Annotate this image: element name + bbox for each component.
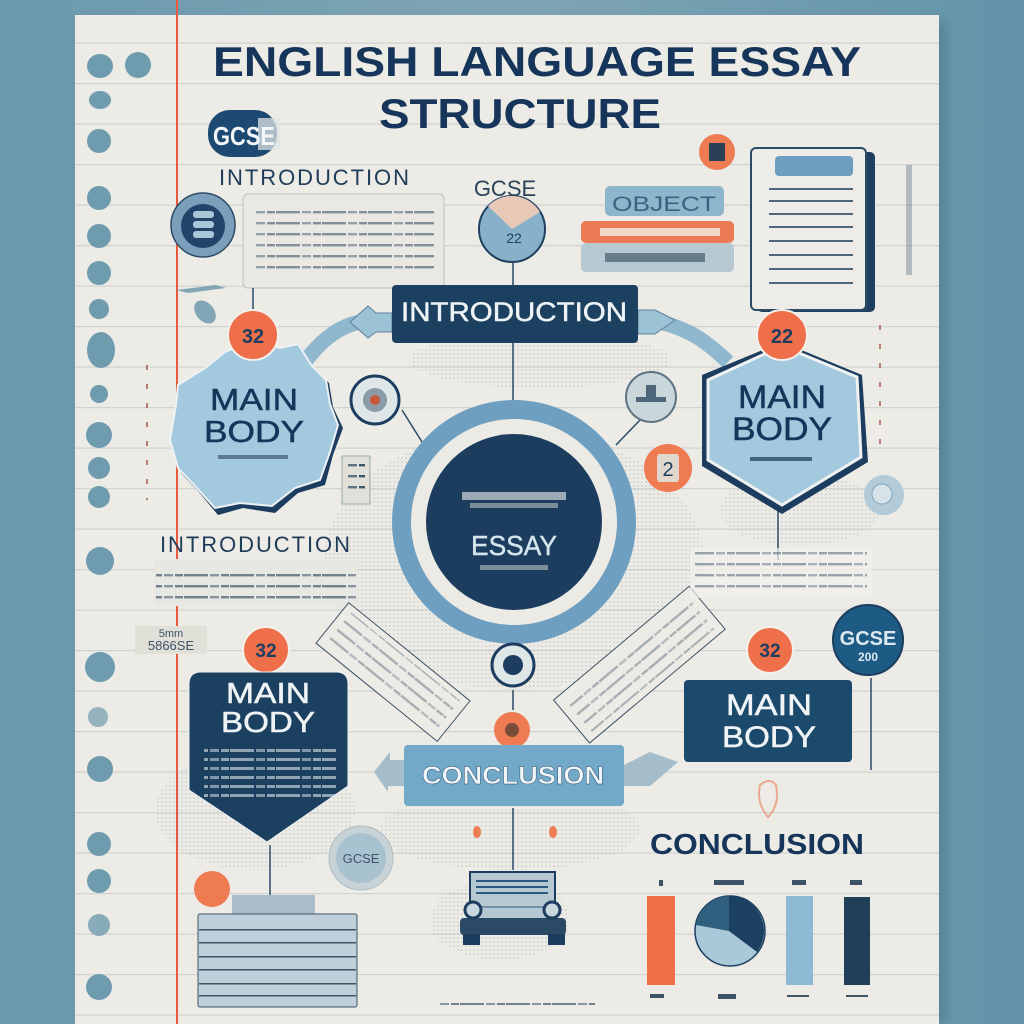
arrows: [302, 306, 728, 792]
badge: main body right: MAIN: [738, 379, 826, 415]
number badge: [228, 310, 278, 360]
tilted note right: [554, 586, 725, 743]
vertical side text: [906, 165, 912, 275]
badge: main body left: MAIN: [210, 382, 298, 417]
label: small note: [135, 626, 207, 654]
tilted note left: [316, 603, 470, 741]
footnote text: [440, 1000, 595, 1005]
badge: main body left: BODY: [204, 414, 304, 449]
label: small note: 5866SE: [148, 638, 194, 653]
essay circle: ESSAY: [471, 530, 557, 561]
text block: introduction mid: [154, 559, 358, 606]
essay circle: [392, 400, 636, 644]
halftone shading: [155, 332, 880, 960]
panel: main body lower right: [684, 680, 852, 762]
number badge lower right: 32: [759, 641, 781, 662]
GCSE badge right: 200: [858, 650, 878, 664]
label: small note: 5mm: [159, 628, 183, 640]
heading: conclusion: CONCLUSION: [650, 829, 864, 861]
small icons: [492, 644, 534, 686]
title: [213, 38, 861, 137]
panel: stacked labels: [581, 186, 734, 272]
panel: stacked labels: OBJECT: [612, 193, 716, 216]
intro banner: INTRODUCTION: [401, 297, 627, 327]
number badge lower left: 32: [255, 641, 277, 662]
badge: main body right: [702, 342, 868, 514]
number badge: 22: [771, 326, 793, 348]
number badge: 32: [242, 326, 264, 348]
icon: grey seal: GCSE: [343, 851, 380, 866]
badge: main body right: BODY: [732, 411, 832, 447]
icon: round badge: [171, 193, 235, 257]
GCSE badge right: GCSE: [840, 628, 896, 650]
punched holes: [85, 52, 151, 1000]
doodle: small orange marks: [473, 781, 777, 838]
conclusion banner: CONCLUSION: [422, 762, 604, 790]
number badge: [757, 310, 807, 360]
icon: laptop: [460, 872, 566, 945]
number badge lower left: [243, 627, 289, 673]
connector lines: [147, 262, 880, 895]
title: ENGLISH LANGUAGE ESSAY: [213, 38, 861, 85]
orange icon: [494, 712, 530, 748]
GCSE badge top left: GCSE: [213, 121, 275, 151]
intro banner: [392, 285, 638, 343]
number badge lower right: [747, 627, 793, 673]
icon: grey seal: [329, 826, 393, 890]
right mid text: [690, 548, 872, 598]
badge: main body left: [170, 340, 343, 515]
panel: main body lower left: MAIN: [226, 678, 310, 710]
panel: main body lower left: BODY: [221, 707, 315, 739]
GCSE pie icon: 22: [506, 230, 522, 246]
GCSE badge top left: [208, 110, 280, 157]
panel: introduction text card: [243, 194, 444, 288]
orange circle: [194, 871, 230, 907]
icon: orange tag: [699, 134, 735, 170]
GCSE pie icon: [474, 176, 545, 262]
panel: main body lower left: [189, 672, 348, 842]
icon: right blue seal: [864, 475, 904, 515]
conclusion banner: [404, 745, 624, 806]
title: STRUCTURE: [379, 90, 661, 137]
doodle: small blue marks left: [176, 285, 226, 328]
heading: introduction top: INTRODUCTION: [219, 165, 409, 190]
small label: [342, 456, 370, 504]
GCSE badge right: [833, 605, 903, 675]
heading: introduction mid: INTRODUCTION: [160, 532, 350, 557]
icon: orange number: [644, 444, 692, 492]
icon: stamp: [626, 372, 676, 422]
panel: main body lower right: BODY: [722, 721, 816, 754]
document icon: [751, 148, 875, 312]
icon: orange number: 2: [662, 459, 674, 481]
panel: lined box: [198, 895, 357, 1007]
small icons around essay: [351, 376, 399, 424]
GCSE pie icon: GCSE: [474, 176, 536, 201]
panel: main body lower right: MAIN: [726, 689, 812, 722]
chart: conclusion bars and pie: [647, 880, 870, 999]
